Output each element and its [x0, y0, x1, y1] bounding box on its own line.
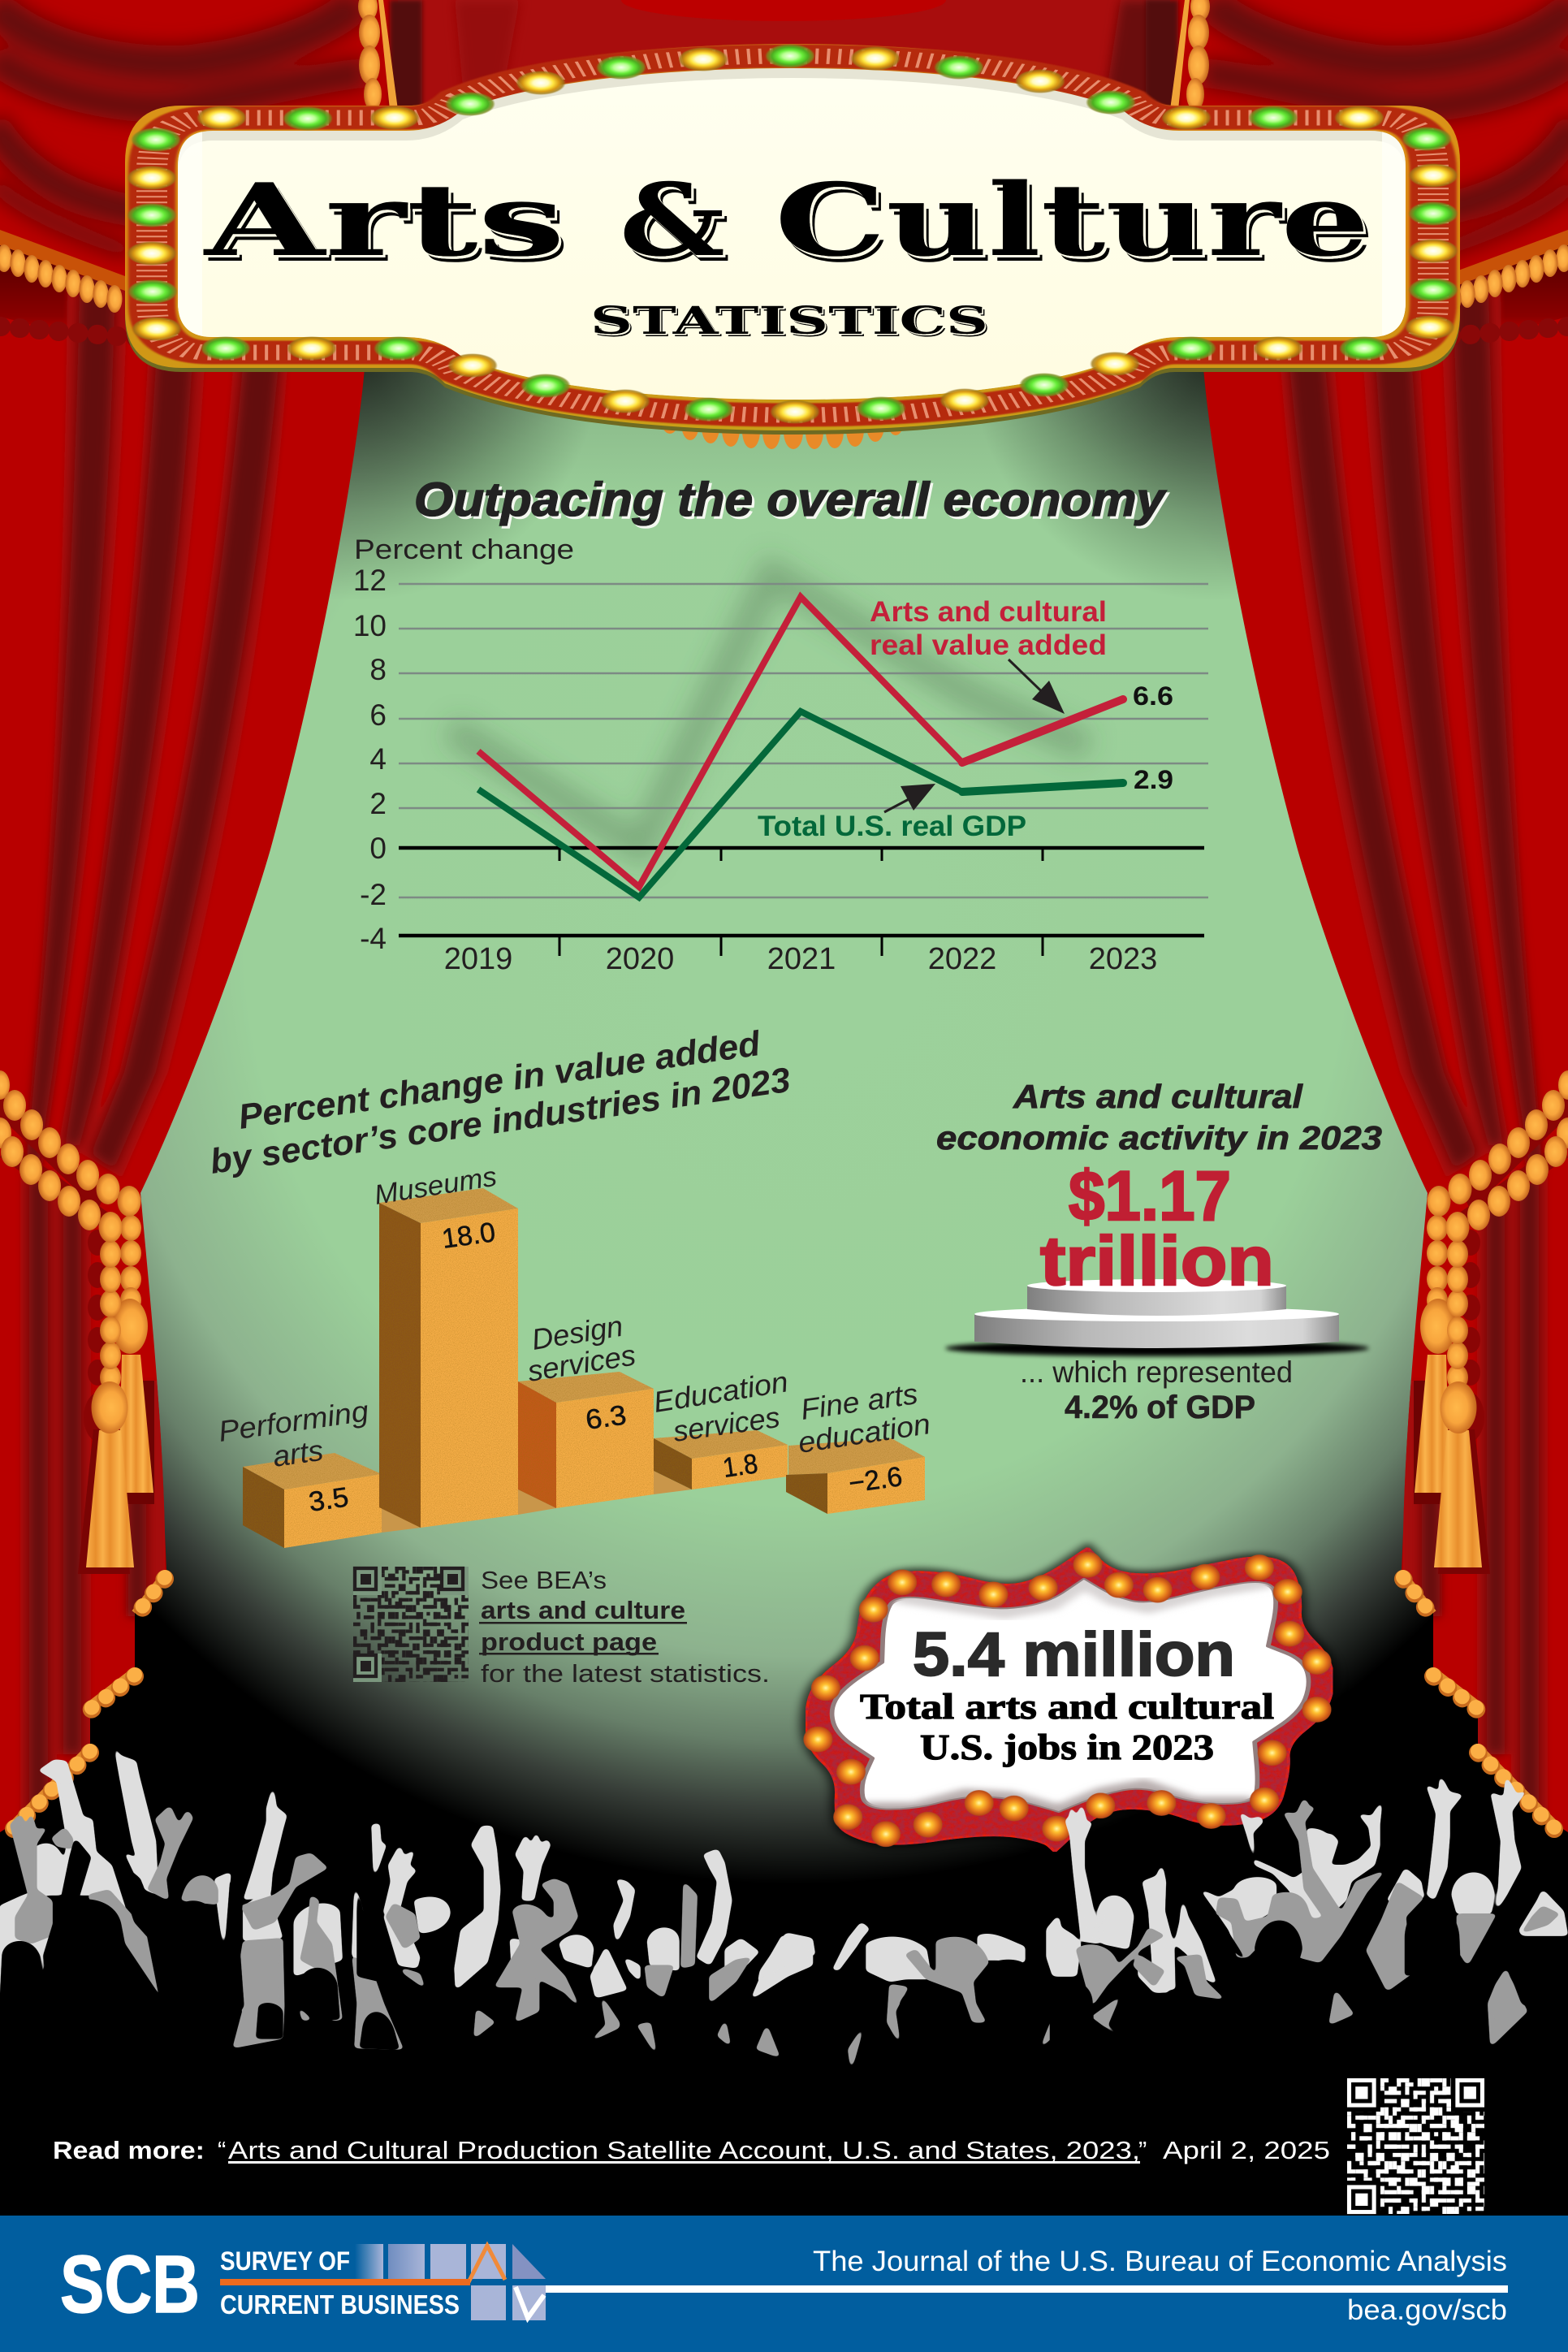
line chart section [353, 473, 1208, 976]
bar labels: education [796, 1407, 932, 1459]
series label: arts: Arts and cultural [870, 596, 1107, 628]
bar labels: Performing [216, 1394, 370, 1448]
QR code and product page note [353, 1566, 770, 1688]
y axis title: Percent change [354, 534, 574, 565]
bar: design services [518, 1372, 654, 1508]
link text: product page [481, 1628, 657, 1656]
footer band [0, 2216, 1568, 2352]
bar values [307, 1217, 904, 1518]
bar labels: arts [270, 1433, 326, 1473]
economic activity callout [936, 1078, 1382, 1425]
chart heading: Outpacing the overall economy [414, 473, 1167, 526]
title: Arts [203, 162, 565, 279]
sign shadow [806, 1548, 1333, 1852]
title: & [620, 162, 725, 279]
jobs number: 5.4 million [913, 1620, 1235, 1689]
end value 2.9: 2.9 [1134, 765, 1173, 794]
jobs caption [860, 1687, 1274, 1767]
bar values: 3.5 [307, 1481, 351, 1518]
right curtain [1146, 0, 1568, 1835]
subtitle: STATISTICS [590, 299, 988, 344]
footer rule [546, 2285, 1508, 2293]
value: $1.17 trillion: trillion [1040, 1223, 1274, 1300]
small QR code [353, 1567, 469, 1682]
which represented note: ... which represented [1020, 1355, 1293, 1389]
x axis labels: 2020 [606, 942, 674, 976]
read more citation [53, 2136, 1330, 2164]
bar labels [216, 1161, 932, 1473]
link text: arts and culture [481, 1596, 685, 1624]
share of GDP: 4.2% of GDP [1065, 1390, 1255, 1425]
SCB logo [60, 2239, 546, 2330]
link text: See BEA’s [481, 1566, 607, 1594]
read more citation: April 2, 2025 [1163, 2136, 1330, 2164]
bar chart heading: Percent change in value added [236, 1024, 763, 1137]
value: $1.17 trillion [1040, 1157, 1274, 1300]
x axis labels: 2023 [1089, 942, 1157, 976]
y axis labels: -4 [360, 922, 387, 955]
jobs sign [803, 1548, 1333, 1852]
marquee panel [178, 68, 1406, 416]
axes and ticks [399, 848, 1204, 956]
series label: GDP: Total U.S. real GDP [758, 811, 1026, 842]
sign border [806, 1548, 1333, 1852]
y axis labels: 6 [369, 698, 387, 732]
bar labels: services [525, 1338, 638, 1388]
read more citation: “ [218, 2136, 226, 2164]
x axis labels [444, 942, 1157, 976]
callout heading: Arts and cultural [1013, 1078, 1304, 1115]
x axis labels: 2021 [767, 942, 836, 976]
bar: education services [654, 1430, 788, 1489]
jobs sign text [860, 1620, 1274, 1767]
x axis labels: 2022 [928, 942, 996, 976]
series label: arts: real value added [870, 629, 1107, 661]
arrow to GDP line [884, 784, 935, 812]
crowd: left half [0, 1744, 812, 2057]
chart shadow [450, 574, 1088, 848]
large QR code [1347, 2078, 1484, 2214]
footer URL: bea.gov/scb [1347, 2294, 1507, 2326]
grid lines [399, 584, 1208, 897]
y axis labels: 4 [369, 742, 387, 776]
footer journal line: The Journal of the U.S. Bureau of Economic Analysis [813, 2246, 1507, 2277]
bar chart section [208, 1024, 932, 1548]
y axis labels: 12 [353, 564, 387, 597]
bar values: 18.0 [440, 1217, 497, 1255]
crowd: right half [755, 1775, 1567, 2071]
bar labels: services [671, 1400, 782, 1448]
marquee bulbs [127, 44, 1458, 424]
title: Culture [775, 162, 1370, 279]
bar values: 6.3 [584, 1399, 628, 1436]
series label: arts [870, 596, 1107, 661]
SCB logo: CURRENT BUSINESS [220, 2289, 460, 2320]
link text: for the latest statistics. [481, 1659, 770, 1688]
y axis labels: 8 [369, 653, 387, 686]
jobs caption: U.S. jobs in 2023 [920, 1727, 1214, 1767]
link text [479, 1566, 770, 1688]
title [203, 162, 1370, 279]
x axis labels: 2019 [444, 942, 512, 976]
read more citation: Read more: [53, 2136, 205, 2164]
left curtain [0, 0, 422, 1835]
y axis labels: 0 [369, 832, 387, 865]
bar values: 1.8 [721, 1448, 760, 1484]
y axis labels: 10 [353, 609, 387, 642]
bar labels: Museums [372, 1161, 499, 1211]
bar: fine arts education [786, 1438, 925, 1514]
read more citation: Arts and Cultural Production Satellite Account, U.S. and States, 2023, [228, 2136, 1140, 2164]
bar: museums [379, 1188, 518, 1528]
hanging beads under marquee [642, 401, 904, 449]
bar labels: Design [529, 1309, 625, 1356]
floor shading [382, 1471, 692, 1533]
line: arts and cultural real value added [478, 597, 1123, 887]
bar chart heading: by sector’s core industries in 2023 [208, 1061, 793, 1182]
y axis labels: 2 [369, 787, 387, 820]
callout heading: economic activity in 2023 [936, 1119, 1382, 1157]
bar labels: Education [651, 1364, 790, 1419]
y axis labels: -2 [360, 878, 387, 911]
top centre drape [382, 0, 1187, 114]
bar values: −2.6 [847, 1461, 904, 1499]
jobs caption: Total arts and cultural [860, 1687, 1274, 1727]
value: $1.17 trillion: $1.17 [1069, 1157, 1231, 1235]
bar labels: Fine arts [798, 1377, 920, 1426]
callout heading [936, 1078, 1382, 1157]
line: total U.S. real GDP [478, 711, 1123, 897]
read more citation: ” [1138, 2136, 1147, 2164]
sign panel [832, 1580, 1309, 1811]
SCB logo: SCB [60, 2239, 200, 2330]
marquee sign [125, 44, 1460, 435]
crowd silhouettes [0, 1744, 1567, 2071]
end value 6.6: 6.6 [1133, 681, 1173, 711]
sign bulbs [803, 1552, 1332, 1847]
SCB logo: SURVEY OF [220, 2246, 350, 2276]
marquee frame [125, 44, 1460, 435]
bar: performing arts [243, 1453, 382, 1548]
y axis labels [353, 564, 387, 955]
arrow to arts line [1009, 659, 1065, 714]
podium [945, 1279, 1369, 1356]
